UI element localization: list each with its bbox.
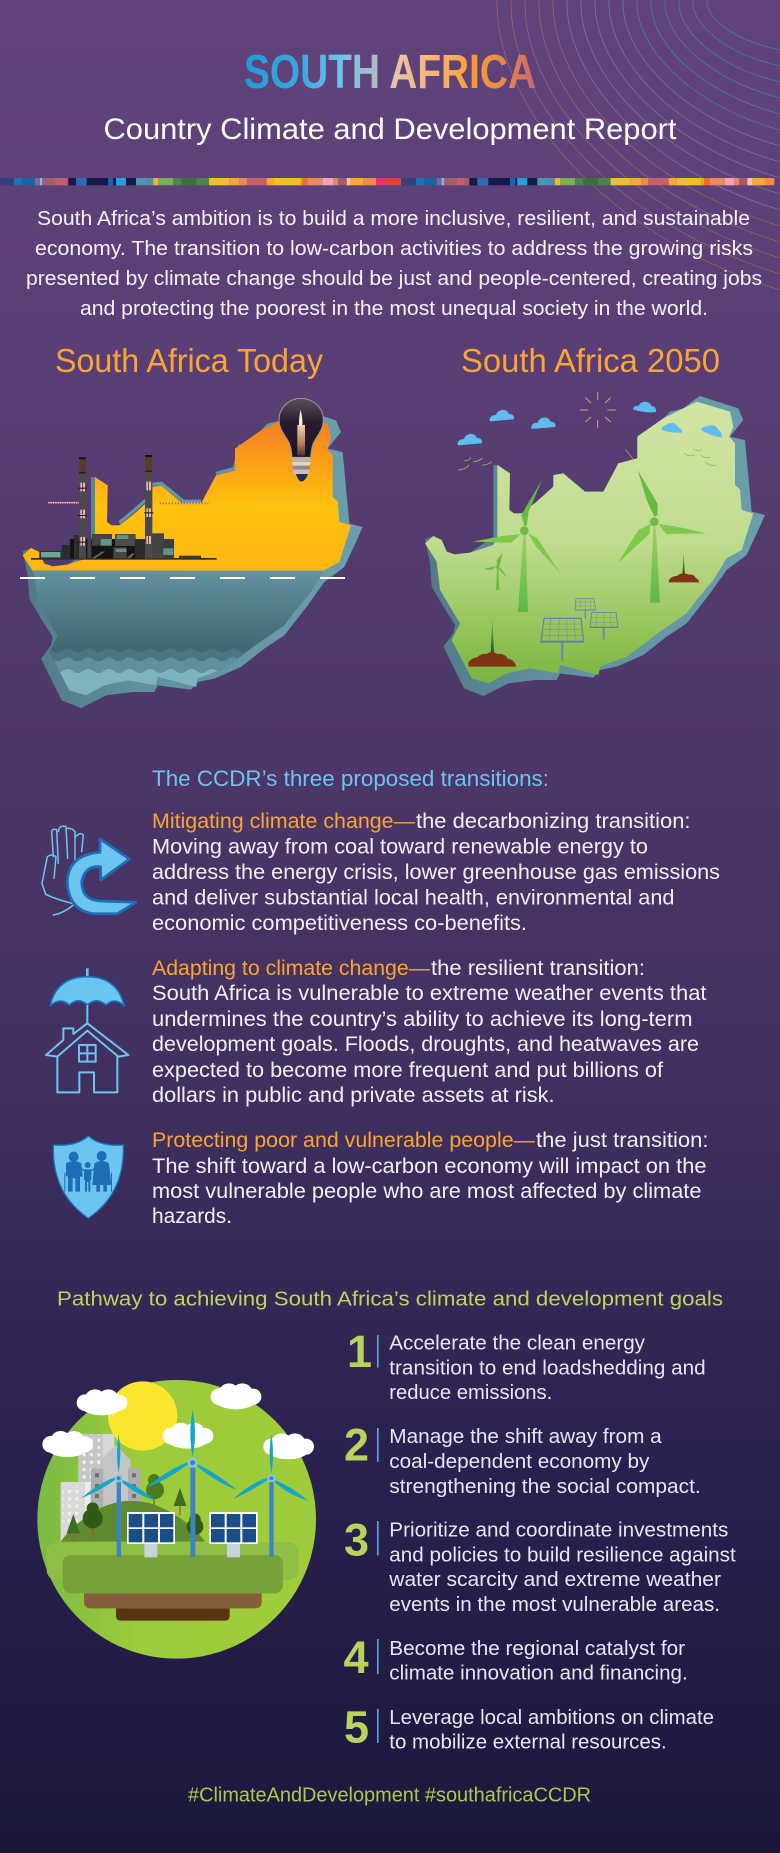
- text block: protecting poor and vulnerable people: hazards.: [152, 1205, 232, 1228]
- icon: buildings: [61, 1434, 141, 1541]
- text block: mitigating climate change: address the energy crisis, lower greenhouse gas emissions: [152, 861, 720, 884]
- pathway step 1: [347, 1326, 706, 1404]
- pathway step 1: Accelerate the clean energy: [389, 1333, 645, 1355]
- intro paragraph: economy. The transition to low-carbon activities to address the growing risks: [35, 237, 753, 260]
- icons: white clouds: [42, 1383, 314, 1459]
- icon: sun rays: [580, 392, 634, 460]
- text block: mitigating climate change: and deliver substantial local health, environmental and: [152, 886, 674, 910]
- text block: adapting to climate change: South Africa is vulnerable to extreme weather events that: [152, 982, 707, 1005]
- pathway step 3: and policies to build resilience against: [389, 1545, 736, 1567]
- pathway step 5: [344, 1701, 714, 1754]
- text block: protecting poor and vulnerable people: The shift toward a low-carbon economy will impact on the: [152, 1155, 706, 1178]
- icon: hand and turn arrow: [42, 826, 136, 915]
- title: SOUTH AFRICA: [244, 46, 536, 99]
- icons: solar panels: [127, 1512, 258, 1557]
- text block: mitigating climate change: [152, 810, 720, 935]
- pathway step 2: strengthening the social compact.: [389, 1476, 701, 1498]
- pathway step 2: coal-dependent economy by: [389, 1451, 649, 1473]
- ground layers: [47, 1542, 298, 1621]
- text block: mitigating climate change: the decarbonizing transition:: [416, 810, 690, 833]
- text block: adapting to climate change: the resilient transition:: [431, 957, 645, 980]
- icons: birds: [458, 449, 717, 470]
- icon: plant mound right: [669, 553, 699, 582]
- pathway step 4: 4: [344, 1632, 369, 1683]
- icon: sun: [108, 1381, 177, 1451]
- intro paragraph: and protecting the poorest in the most unequal society in the world.: [80, 297, 708, 320]
- pathway step 5: 5: [344, 1701, 369, 1752]
- heading: three proposed transitions: The CCDR’s three proposed transitions:: [152, 766, 549, 791]
- text block: mitigating climate change: economic competitiveness co-benefits.: [152, 912, 527, 935]
- power station: [31, 455, 217, 560]
- icons: wind turbines: [81, 1410, 308, 1557]
- icon: solar panel small: [575, 598, 596, 619]
- pathway step 3: water scarcity and extreme weather: [388, 1569, 721, 1591]
- icon: large wind turbine left: [473, 480, 560, 612]
- pathway step 1: 1: [347, 1326, 372, 1377]
- icon: solar panel large: [541, 618, 584, 661]
- icon: small wind turbine: [483, 553, 508, 590]
- pathway step 1: transition to end loadshedding and: [389, 1358, 706, 1380]
- text block: adapting to climate change: dollars in public and private assets at risk.: [152, 1084, 554, 1107]
- pathway step 3: [344, 1514, 736, 1616]
- pathway step 5: Leverage local ambitions on climate: [389, 1707, 714, 1729]
- text block: mitigating climate change: Mitigating climate change—: [152, 810, 415, 833]
- map: South Africa 2050: [417, 392, 765, 696]
- text block: protecting poor and vulnerable people: most vulnerable people who are most affected by climate: [152, 1180, 702, 1203]
- icon: umbrella over house: [46, 968, 128, 1092]
- icon: solar panel middle: [590, 612, 618, 640]
- pathway step 5: to mobilize external resources.: [389, 1732, 667, 1754]
- pathway step 2: Manage the shift away from a: [389, 1426, 663, 1448]
- pathway step 3: Prioritize and coordinate investments: [389, 1520, 728, 1542]
- text block: adapting to climate change: development goals. Floods, droughts, and heatwaves are: [152, 1033, 699, 1056]
- pathway step 3: 3: [344, 1514, 369, 1566]
- pathway step 1: reduce emissions.: [389, 1382, 552, 1404]
- icon: family in shield: [53, 1136, 123, 1218]
- icon: light bulb with candle: [279, 398, 323, 481]
- contour lines, top right: [497, 0, 780, 290]
- text block: protecting poor and vulnerable people: the just transition:: [536, 1129, 708, 1152]
- map: South Africa today: [14, 398, 368, 711]
- pathway step 3: events in the most vulnerable areas.: [389, 1594, 720, 1616]
- icon: large wind turbine right: [618, 470, 707, 603]
- colour stripe divider: [0, 178, 774, 185]
- text block: protecting poor and vulnerable people: [152, 1129, 708, 1228]
- pathway step 2: 2: [344, 1420, 369, 1471]
- pathway step 4: climate innovation and financing.: [389, 1663, 688, 1685]
- icons: blue clouds: [458, 402, 722, 445]
- text block: adapting to climate change: undermines the country’s ability to achieve its long-term: [152, 1008, 692, 1031]
- heading: South Africa 2050: South Africa 2050: [461, 342, 720, 379]
- text block: adapting to climate change: expected to become more frequent and put billions of: [152, 1059, 663, 1082]
- dashed horizon line: [20, 577, 345, 579]
- trees and hill: [61, 1474, 205, 1542]
- intro paragraph: [26, 207, 762, 320]
- text block: mitigating climate change: Moving away from coal toward renewable energy to: [152, 836, 648, 858]
- pathway step 4: Become the regional catalyst for: [389, 1638, 685, 1660]
- text block: adapting to climate change: [152, 957, 707, 1107]
- illustration: green energy landscape: [37, 1380, 316, 1659]
- text block: adapting to climate change: Adapting to climate change—: [152, 957, 430, 980]
- pathway step 4: [344, 1632, 688, 1685]
- intro paragraph: presented by climate change should be just and people-centered, creating jobs: [26, 267, 762, 290]
- icon: plant mound lower left: [468, 618, 516, 667]
- pathway step 2: [344, 1420, 701, 1498]
- heading: South Africa Today: South Africa Today: [55, 342, 323, 379]
- subtitle: Country Climate and Development Report: [104, 113, 677, 146]
- text block: protecting poor and vulnerable people: Protecting poor and vulnerable people—: [152, 1129, 535, 1152]
- hashtags: #ClimateAndDevelopment #southafricaCCDR: [188, 1784, 591, 1806]
- heading: pathway: Pathway to achieving South Africa’s climate and development goals: [57, 1288, 723, 1311]
- intro paragraph: South Africa’s ambition is to build a more inclusive, resilient, and sustainable: [37, 207, 750, 230]
